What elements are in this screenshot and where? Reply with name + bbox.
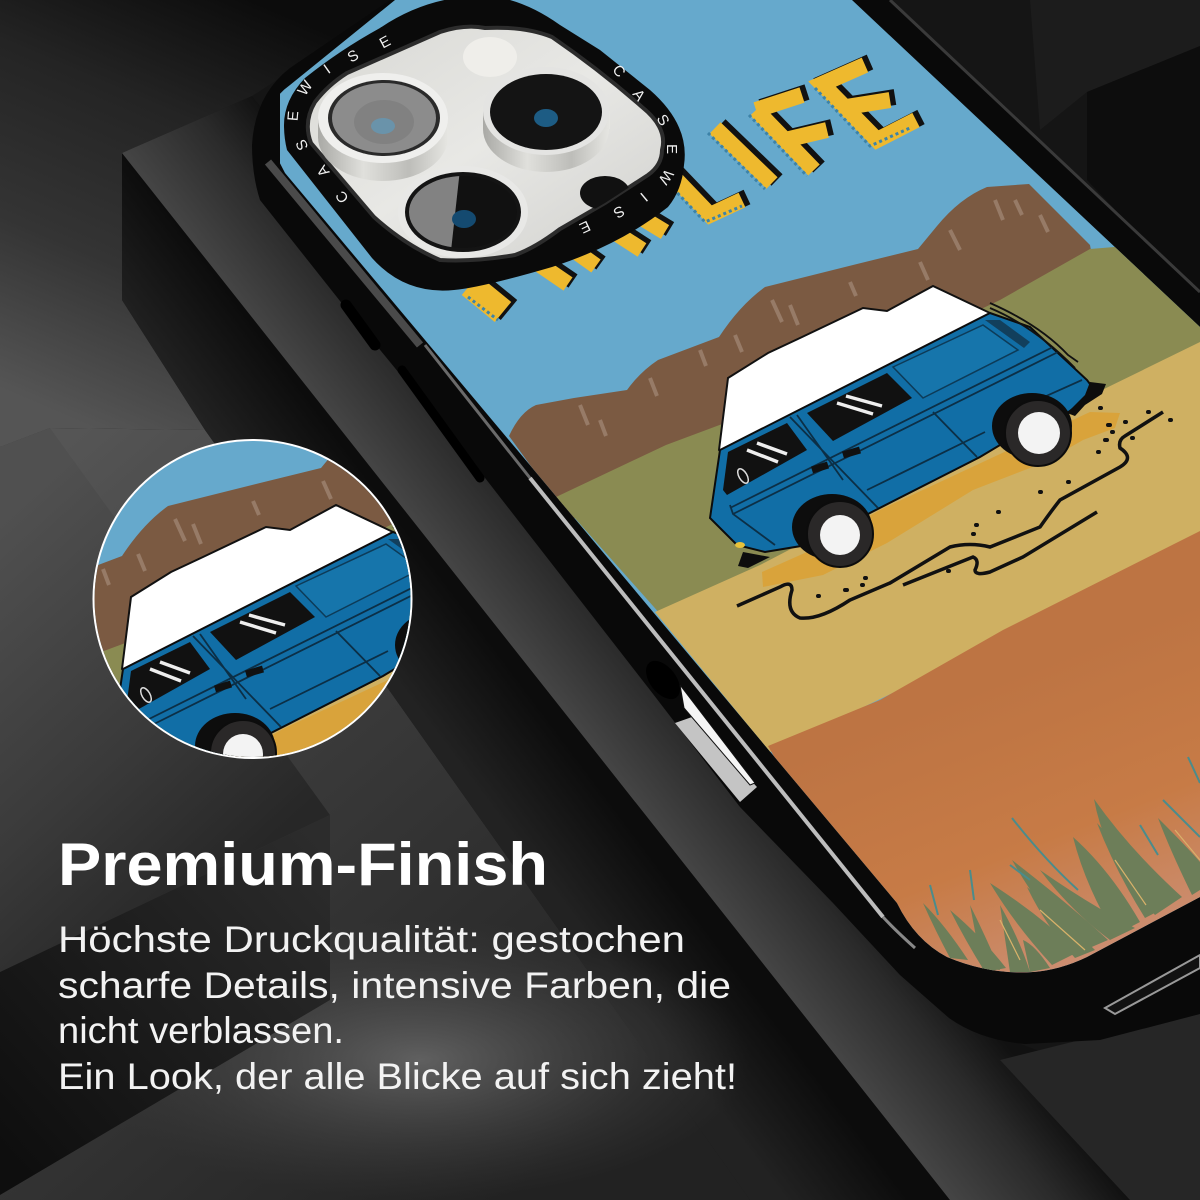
- brand lettering: E: [377, 33, 394, 52]
- camera bumper: [284, 0, 685, 291]
- phone case body: [252, 0, 1200, 1044]
- brand lettering: I: [637, 189, 651, 204]
- body text: Ein Look, der alle Blicke auf sich zieht!: [58, 1056, 737, 1097]
- lens top-right: [483, 67, 610, 172]
- zoom circle: van detail: [92, 439, 412, 759]
- grass: [923, 757, 1200, 972]
- brand lettering: C: [609, 62, 629, 81]
- brand lettering: E: [285, 110, 302, 122]
- brand lettering: S: [653, 112, 672, 129]
- brand lettering: C: [332, 187, 352, 206]
- camera window: [308, 27, 663, 260]
- brand lettering: [285, 33, 680, 236]
- brand lettering: W: [654, 166, 677, 188]
- body text: nicht verblassen.: [58, 1010, 344, 1051]
- body text: scharfe Details, intensive Farben, die: [58, 965, 731, 1006]
- charging port: [1105, 955, 1200, 1014]
- sensor: [580, 176, 630, 210]
- body text: Höchste Druckqualität: gestochen: [58, 919, 685, 960]
- body text: [58, 919, 737, 1097]
- brand lettering: W: [294, 77, 317, 99]
- brand lettering: S: [345, 47, 362, 66]
- phone artwork: van life landscape: [280, 0, 1200, 975]
- side buttons: [346, 305, 757, 802]
- camera module: [284, 0, 685, 291]
- lens bottom: [405, 172, 528, 258]
- flash: [463, 37, 517, 77]
- brand lettering: I: [321, 61, 334, 78]
- brand lettering: E: [577, 217, 593, 236]
- brand lettering: A: [314, 162, 333, 180]
- slogan: van life lettering: [468, 62, 921, 320]
- brand lettering: E: [663, 144, 680, 154]
- brand lettering: S: [293, 137, 312, 153]
- lens top-left: [318, 73, 448, 181]
- brand lettering: A: [629, 86, 648, 104]
- brand lettering: S: [610, 202, 627, 221]
- heading: Premium-Finish: [58, 831, 548, 898]
